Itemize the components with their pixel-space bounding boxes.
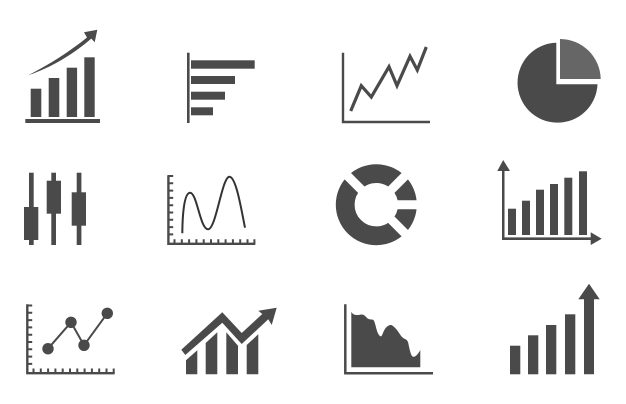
icon: bars with up arrow: [510, 284, 600, 374]
icon: bar chart with curved arrow: [25, 30, 100, 123]
icon: bar chart with axis arrows: [497, 160, 602, 245]
icon: pie chart: [518, 39, 601, 123]
icon: candlestick chart: [24, 173, 86, 245]
icon: dot line chart with ticks: [27, 304, 115, 373]
icon: horizontal bar chart: [187, 53, 255, 123]
icon: bars under trend arrow: [181, 308, 277, 374]
icon: zigzag line chart: [343, 47, 430, 122]
icon: segmented donut chart: [345, 174, 420, 236]
icon: area chart: [345, 304, 433, 373]
icon: curve chart with ticks: [168, 175, 255, 244]
